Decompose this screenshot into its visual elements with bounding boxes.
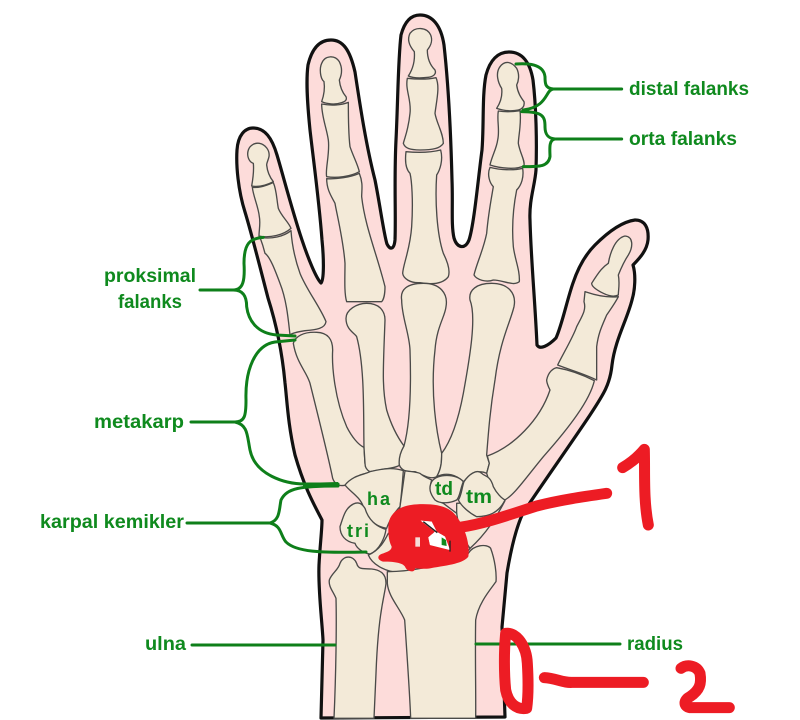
scribble over carpal bones: [378, 504, 469, 571]
bone: capitate: [393, 471, 460, 533]
bone: hamate: [345, 469, 403, 528]
bone: thumb distal phalanx: [592, 236, 632, 296]
bone: pinky distal phalanx: [248, 143, 273, 186]
bracket: metakarp: [191, 340, 338, 484]
green letter fragment showing through scribble: [442, 537, 447, 546]
bone: trapezium: [458, 472, 505, 517]
number 1: [623, 449, 648, 525]
finger bones: [248, 29, 632, 380]
leader line: ulna: [192, 644, 335, 646]
bracket: orta falanks: [522, 112, 622, 167]
bracket: distal falanks: [516, 64, 622, 110]
bone: thumb metacarpal: [487, 368, 594, 501]
bone: middle middle phalanx: [403, 78, 443, 150]
forearm bones: [329, 546, 496, 718]
bone: pinky middle phalanx: [252, 183, 291, 237]
label: ha: ha: [367, 489, 391, 509]
bone: lunate: [368, 533, 470, 573]
label: metakarp: metakarp: [94, 412, 184, 433]
red annotation: scribble and number 1: [378, 449, 648, 571]
label: proksimal falanks: [104, 266, 196, 313]
thick bracket junction: [303, 482, 338, 488]
bone: ulna: [329, 557, 386, 718]
label: tri: tri: [347, 521, 369, 541]
bracket: proksimal falanks: [200, 237, 295, 336]
bone: ring distal phalanx: [320, 57, 346, 104]
label: radius: radius: [627, 634, 683, 655]
bone: pinky metacarpal: [293, 332, 370, 486]
metacarpal and carpal bones: [293, 283, 594, 573]
line from scribble to number 1: [460, 493, 607, 527]
hand outline: [237, 15, 648, 718]
label: proksimal falanks: falanks: [118, 292, 182, 313]
bone: middle metacarpal: [399, 283, 446, 478]
bone: middle distal phalanx: [408, 29, 435, 78]
bone: index distal phalanx: [497, 62, 524, 111]
label: karpal kemikler: karpal kemikler: [40, 512, 185, 533]
label: distal falanks: distal falanks: [629, 79, 749, 100]
leader line: radius: [476, 642, 620, 646]
bone: thumb proximal phalanx: [558, 292, 618, 380]
bone: middle proximal phalanx: [403, 150, 449, 284]
bone: ring proximal phalanx: [327, 173, 385, 302]
label: tm: tm: [466, 487, 492, 508]
drawn zero: [504, 633, 528, 709]
number 2: [681, 666, 729, 708]
bone: index proximal phalanx: [474, 167, 523, 284]
bone: index middle phalanx: [490, 111, 524, 168]
bone: radius: [387, 546, 496, 718]
bone lines showing through scribble: [423, 522, 450, 552]
bone: triquetrum: [340, 503, 386, 554]
bracket: karpal kemikler: [187, 486, 366, 552]
label: td: td: [435, 479, 453, 500]
bone: ring middle phalanx: [322, 102, 359, 177]
label: proksimal falanks: proksimal: [104, 266, 196, 287]
label: ulna: ulna: [145, 634, 186, 655]
bone: ring metacarpal: [346, 303, 404, 472]
label: orta falanks: orta falanks: [629, 129, 737, 150]
bone: scaphoid: [457, 501, 505, 548]
hole detail inside scribble: [421, 521, 450, 550]
red annotation: zero, dash and number 2: [504, 633, 729, 709]
bone: trapezoid: [430, 475, 463, 503]
bone: index metacarpal: [437, 283, 514, 482]
drawn dash: [544, 678, 643, 682]
bone: pinky proximal phalanx: [260, 231, 326, 335]
speck inside scribble: [415, 537, 420, 547]
